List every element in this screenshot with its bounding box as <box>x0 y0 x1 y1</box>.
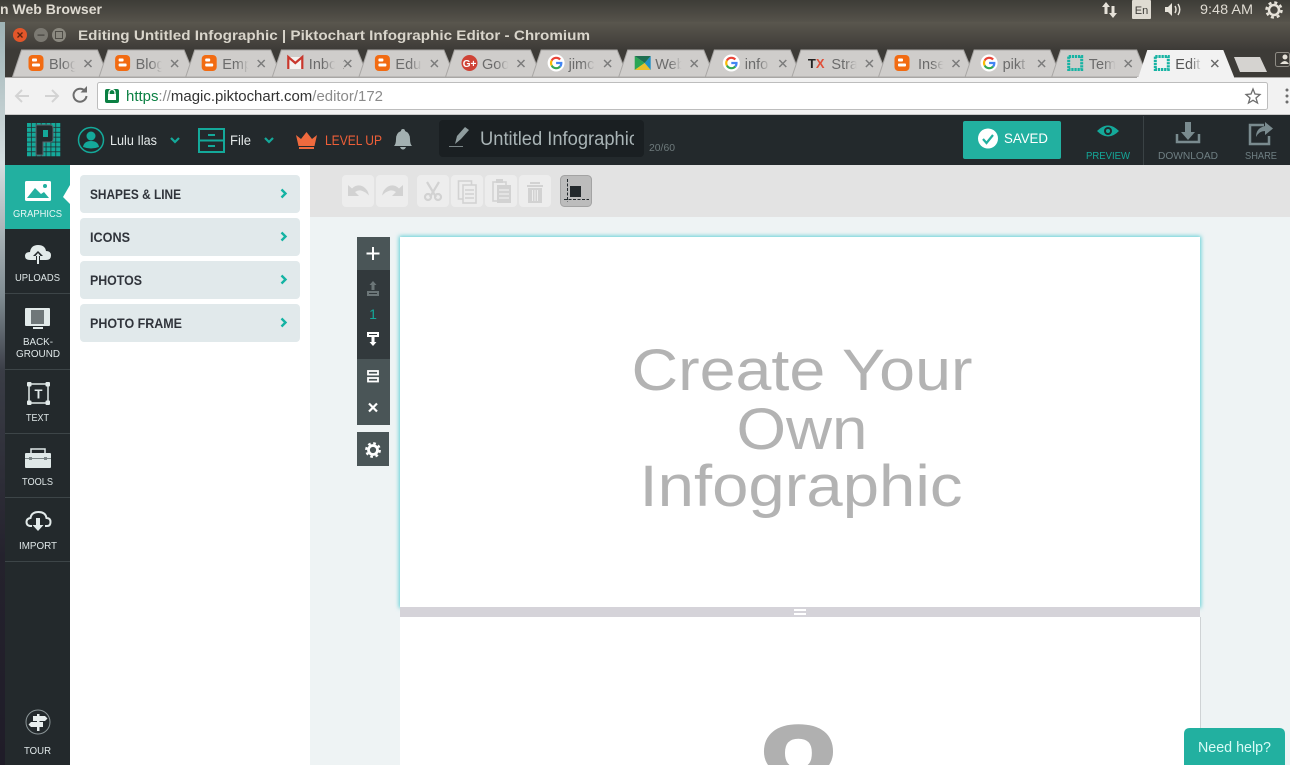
tab: Blog <box>99 50 195 77</box>
tab: Stra: X <box>816 56 825 71</box>
sidebar item: import: IMPORT <box>19 540 58 552</box>
button: cut <box>417 175 449 207</box>
icon: file cabinet <box>199 129 224 152</box>
tab: Edu <box>359 50 455 77</box>
browser window title bar <box>5 22 1290 77</box>
icon: delete page <box>369 404 377 412</box>
profile button <box>1276 52 1290 66</box>
menu item: photos <box>80 261 300 299</box>
chevron <box>171 138 179 142</box>
document title: Untitled Infographic <box>480 129 638 150</box>
sidebar item: uploads: UPLOADS <box>15 272 60 284</box>
file label: File <box>230 133 251 148</box>
button: delete <box>519 175 551 207</box>
tab: pikt <box>965 50 1061 77</box>
preview: PREVIEW <box>1086 150 1130 162</box>
user name: Lulu Ilas <box>110 133 157 148</box>
icon: bookmark star <box>1246 89 1260 103</box>
document title box <box>439 120 644 157</box>
icon: forward <box>45 90 58 102</box>
icon: crown <box>296 132 317 149</box>
clock: 9:48 AM <box>1200 2 1253 17</box>
sidebar item: tour: TOUR <box>24 745 51 757</box>
icon: system gear <box>1266 2 1282 18</box>
left sidebar <box>5 165 70 765</box>
tab: Empl <box>186 50 282 77</box>
tab: Google Plus <box>446 50 542 77</box>
button: copy <box>451 175 483 207</box>
tab: Stra <box>792 50 888 77</box>
menu item: photo frame: PHOTO FRAME <box>90 315 182 331</box>
sidebar item: background: BACK- <box>23 336 53 348</box>
sidebar item: uploads <box>15 245 60 284</box>
need help button: Need help? <box>1198 739 1271 756</box>
tab: Tem <box>1052 50 1148 77</box>
menu item: photo frame <box>80 304 300 342</box>
tab: jimc <box>532 50 628 77</box>
window buttons <box>13 28 66 42</box>
block resize handle <box>400 607 1200 617</box>
icon: pen <box>449 127 469 147</box>
level up: LEVEL UP <box>325 132 382 148</box>
logo <box>27 123 61 157</box>
menu item: shapes and line: SHAPES & LINE <box>90 186 181 202</box>
language indicator <box>1132 0 1151 19</box>
new tab button <box>1234 57 1267 72</box>
sidebar item: text: TEXT <box>26 412 49 424</box>
chevron <box>265 138 273 142</box>
page controls column <box>357 237 390 466</box>
tab: Edit (active): Edit <box>1175 57 1200 73</box>
preview <box>1086 126 1130 162</box>
system top bar: n Web Browser <box>0 2 103 17</box>
sidebar item: text <box>26 382 50 424</box>
system top bar <box>0 0 1290 22</box>
headline: Own <box>736 397 868 462</box>
icon: move page down <box>367 332 379 346</box>
saved button: SAVED <box>1004 130 1048 146</box>
edit toolbar <box>310 165 1290 217</box>
canvas: first block <box>399 236 1201 608</box>
menu item: photos: PHOTOS <box>90 272 142 288</box>
tab: Edu: Educ <box>395 57 428 73</box>
url: https://magic.piktochart.com /editor/172 <box>126 89 383 105</box>
sidebar item: import <box>19 512 58 552</box>
user avatar <box>78 128 104 152</box>
button: snap to grid <box>560 176 592 206</box>
download <box>1158 122 1218 162</box>
button: paste <box>485 175 517 207</box>
canvas right edge <box>1200 617 1201 765</box>
sidebar item: tools: TOOLS <box>22 476 53 488</box>
sidebar item: text: T <box>35 386 43 402</box>
sidebar item: graphics <box>5 165 70 229</box>
icon: bell <box>394 129 412 150</box>
tab: Edit (active) <box>1138 50 1234 78</box>
tab: Blog: Blog <box>136 57 165 73</box>
icon: lock <box>105 89 119 103</box>
tab: info: info <box>745 57 768 73</box>
tab: Tem: Tem <box>1089 57 1116 73</box>
button: redo <box>376 175 408 207</box>
window title: Editing Untitled Infographic | Piktochart Infographic Editor - Chromium <box>78 27 590 43</box>
icon: move page up <box>367 281 379 296</box>
tab: Google Plus: Goog <box>482 57 517 73</box>
share: SHARE <box>1245 150 1277 162</box>
tab: Inbox: Inbox <box>309 57 345 73</box>
tab: Google Plus: G+ <box>463 59 476 70</box>
language indicator: En <box>1135 5 1148 17</box>
tab: Stra: Stra <box>831 57 859 73</box>
sidebar item: tour <box>24 710 51 757</box>
tab: pikt: pikt <box>1003 57 1025 73</box>
sidebar item: tools <box>22 449 53 488</box>
icon: split page <box>368 371 378 382</box>
icon: page settings <box>357 432 389 466</box>
sidebar item: graphics: GRAPHICS <box>13 208 62 220</box>
headline: Create Your <box>632 338 972 403</box>
icon: browser menu <box>1286 88 1288 104</box>
address bar <box>98 82 1268 110</box>
icon: speaker <box>1165 3 1180 16</box>
tab: Inse: Inse <box>918 57 945 73</box>
icon: back <box>16 90 29 102</box>
button: undo <box>342 175 374 207</box>
tab: Web <box>619 50 715 77</box>
download: DOWNLOAD <box>1158 150 1218 162</box>
tab: Empl: Empl <box>222 57 255 73</box>
tab: Blog <box>12 50 108 77</box>
tab: Web: Web <box>655 57 685 73</box>
page number: 1 <box>369 306 377 322</box>
graphics panel <box>70 165 310 765</box>
tab: info <box>705 50 801 77</box>
tab: Stra: T <box>808 56 816 71</box>
headline <box>632 338 972 519</box>
icon: add page <box>366 247 380 260</box>
tab: jimc: jimc <box>568 57 594 73</box>
sidebar item: background <box>16 308 60 360</box>
menu item: shapes and line <box>80 175 300 213</box>
wallpaper strip <box>0 22 5 765</box>
tab: Blog: Blog <box>49 57 78 73</box>
need help button <box>1184 728 1285 765</box>
canvas: second block <box>400 617 1200 765</box>
browser tabs <box>12 50 1290 78</box>
tab: Inbox <box>272 50 368 77</box>
menu item: icons <box>80 218 300 256</box>
tab: Inse <box>878 50 974 77</box>
icon: reload <box>74 86 87 102</box>
character count: 20/60 <box>649 142 675 154</box>
browser toolbar <box>5 77 1290 115</box>
menu item: icons: ICONS <box>90 229 130 245</box>
icon: network arrows <box>1102 2 1117 18</box>
headline: Infographic <box>640 454 962 519</box>
sidebar item: background: GROUND <box>16 348 60 360</box>
share <box>1245 122 1277 162</box>
saved button <box>963 121 1061 159</box>
app header <box>5 115 1290 165</box>
